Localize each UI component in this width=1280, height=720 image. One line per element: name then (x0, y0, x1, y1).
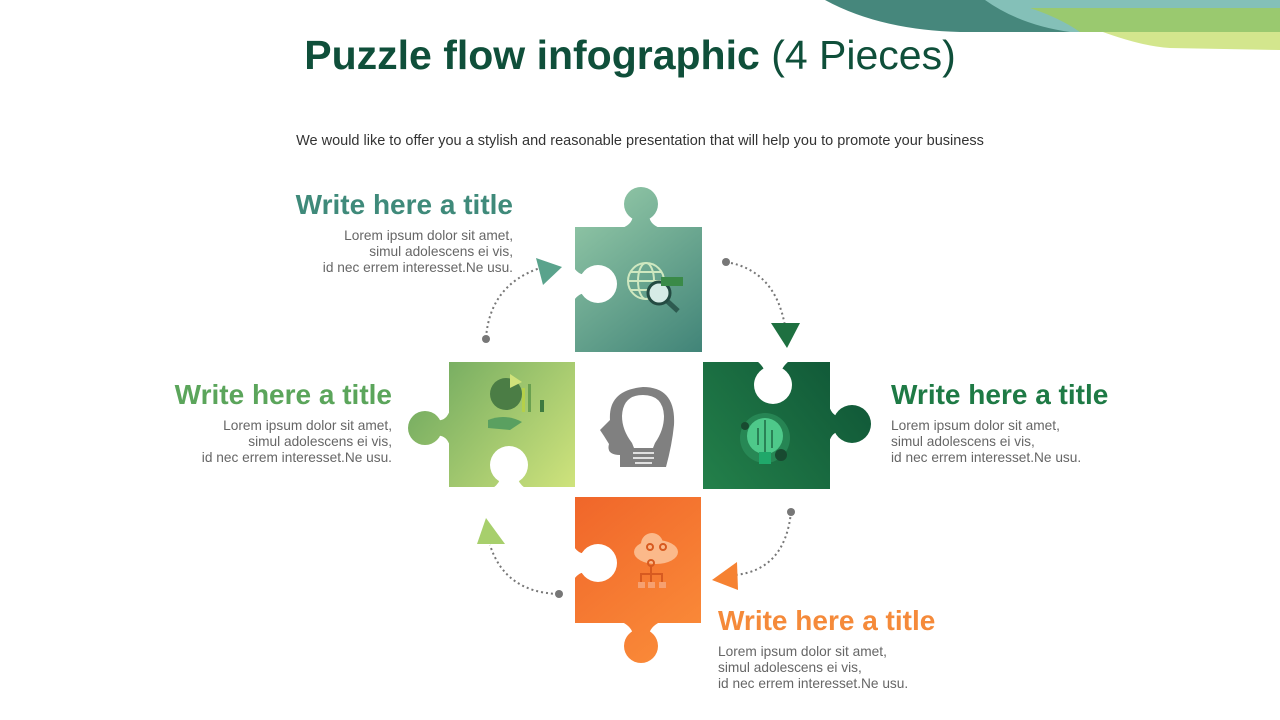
text: top-left: Lorem ipsum dolor sit amet, (344, 228, 513, 243)
piece: right (703, 361, 871, 489)
text: left: id nec errem interesset.Ne usu. (202, 450, 392, 465)
icon: globe search (628, 263, 664, 299)
subtitle: We would like to offer you a stylish and reasonable presentation that will help you to promote your business (296, 133, 984, 149)
text: top-left (296, 189, 513, 275)
piece: left (408, 362, 575, 488)
text: top-left: id nec errem interesset.Ne usu. (323, 260, 513, 275)
decoration: top-right waves (825, 0, 1280, 50)
text: bottom: Lorem ipsum dolor sit amet, (718, 644, 887, 659)
icon: cloud network (634, 540, 678, 564)
arrows: flow (486, 262, 791, 594)
text: top-left: Write here a title (296, 189, 513, 220)
text: top-left: simul adolescens ei vis, (369, 244, 513, 259)
text: left: Lorem ipsum dolor sit amet, (223, 418, 392, 433)
text: bottom: id nec errem interesset.Ne usu. (718, 676, 908, 691)
icon: head with bulb (600, 387, 674, 467)
text: right: Lorem ipsum dolor sit amet, (891, 418, 1060, 433)
text: left: simul adolescens ei vis, (248, 434, 392, 449)
text: left (174, 379, 392, 465)
text: right: id nec errem interesset.Ne usu. (891, 450, 1081, 465)
text: bottom (718, 605, 935, 691)
text: right (891, 379, 1108, 465)
text: right: Write here a title (891, 379, 1108, 410)
icon: circuit bulb (740, 413, 790, 463)
piece: bottom (574, 497, 701, 663)
text: left: Write here a title (175, 379, 392, 410)
icon: chart in hand (490, 378, 522, 410)
title: Puzzle flow infographic (4 Pieces) (304, 32, 956, 78)
text: bottom: Write here a title (718, 605, 935, 636)
piece: top (574, 187, 702, 352)
text: right: simul adolescens ei vis, (891, 434, 1035, 449)
text: bottom: simul adolescens ei vis, (718, 660, 862, 675)
